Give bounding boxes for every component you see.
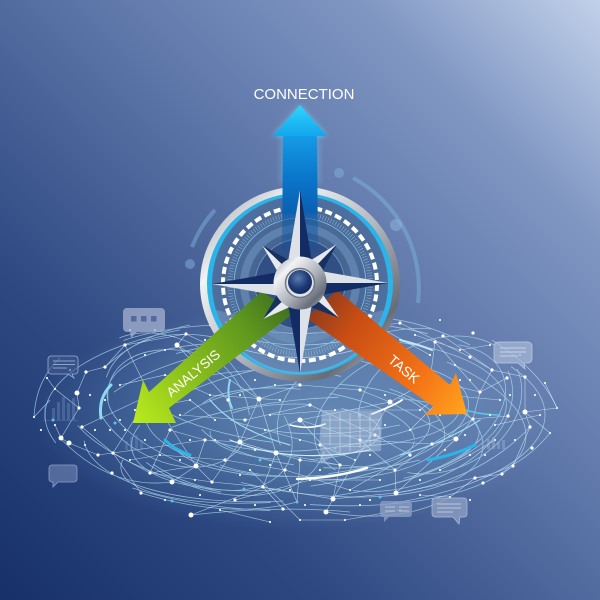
label: task: TASK [385,351,423,387]
connecting lines [34,323,557,522]
arrow: task (orange) [306,290,467,415]
heading: connection: CONNECTION [254,86,354,103]
bar chart: right [487,437,505,449]
world map chat panel [319,411,382,464]
decorative orbit arcs around compass [185,168,419,303]
chat bubble: left text [48,356,78,378]
bar chart: left [43,397,78,421]
compass hub [274,256,326,310]
diagonal points [262,245,286,274]
thick highlight arcs [100,340,500,479]
network globe of connected dots [33,303,557,530]
chat bubble: three dots [123,308,165,338]
network dots [34,320,557,522]
bar chart: centre left [125,435,143,450]
chat bubble: bottom right [432,498,467,524]
chat bubble: bottom centre [380,501,412,522]
arrow: analysis (green) [133,291,294,423]
arrow: connection (blue) [273,105,327,252]
compass dial [200,186,400,382]
chat bubble: right [494,342,532,369]
compass star [212,190,388,373]
label: analysis: ANALYSIS [164,347,223,400]
chat bubble: lower left [49,465,77,487]
cardinal points [287,190,300,283]
orbit arcs [34,303,557,527]
